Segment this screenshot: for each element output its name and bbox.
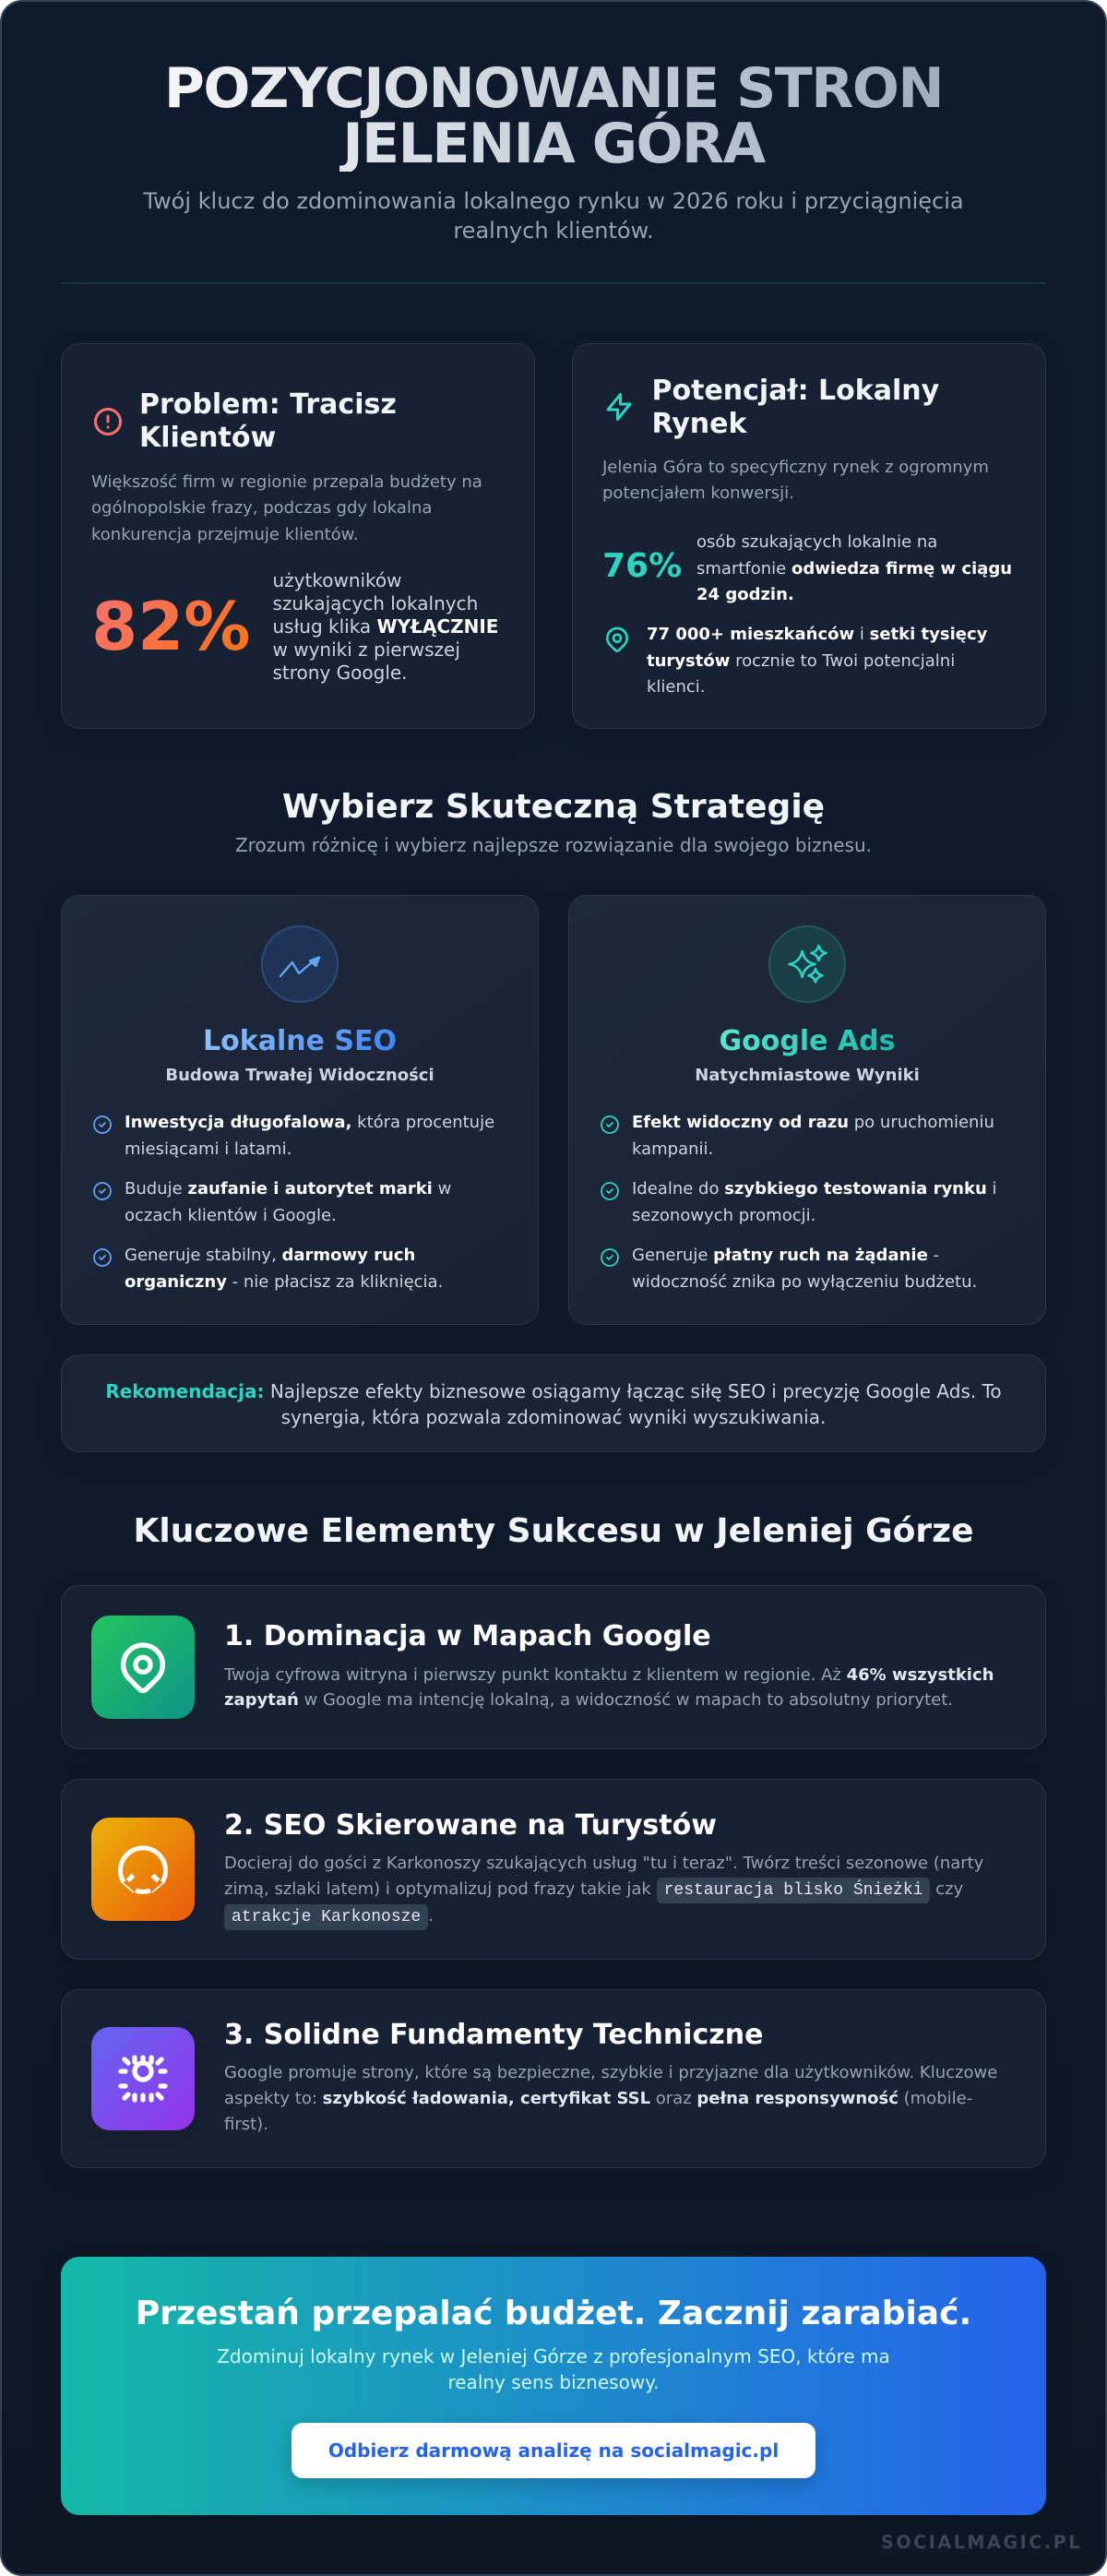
- element 1 title: 1. Dominacja w Mapach Google: [224, 1620, 711, 1652]
- CTA heading: Przestań przepalać budżet. Zacznij zarabiać.: [136, 2294, 971, 2332]
- panel: local SEO: [61, 895, 539, 1325]
- icon: chip: [91, 2027, 195, 2130]
- benefit 1: kampanii.: [632, 1139, 713, 1159]
- Ads subtitle: Natychmiastowe Wyniki: [695, 1066, 920, 1085]
- benefit 2: sezonowych promocji.: [632, 1206, 815, 1225]
- problem heading: [139, 388, 397, 454]
- strategy subtitle: Zrozum różnicę i wybierz najlepsze rozwiązanie dla swojego biznesu.: [235, 834, 872, 856]
- element 3 text: [224, 2063, 997, 2134]
- panel: element 2: [61, 1779, 1046, 1960]
- subtitle: realnych klientów.: [453, 218, 654, 244]
- benefit 3: organiczny - nie płacisz za kliknięcia.: [125, 1272, 443, 1292]
- header: [61, 56, 1046, 284]
- benefit 2: Buduje zaufanie i autorytet marki w: [125, 1179, 451, 1199]
- potential heading: Potencjał: Lokalny: [651, 375, 939, 407]
- title: [61, 61, 1046, 172]
- element 2 text: Docieraj do gości z Karkonoszy szukających usług "tu i teraz". Twórz treści sezonowe (narty: [224, 1854, 983, 1873]
- benefit 3: Generuje stabilny, darmowy ruch: [125, 1246, 415, 1265]
- stat description: [273, 569, 498, 684]
- panel: call to action: [61, 2257, 1046, 2515]
- potential description: [601, 458, 989, 503]
- problem heading: Problem: Tracisz: [139, 388, 397, 421]
- element 2 title: 2. SEO Skierowane na Turystów: [224, 1809, 717, 1842]
- benefit 3: [93, 1246, 443, 1292]
- potential heading: Rynek: [651, 408, 746, 440]
- panel: Google Ads: [568, 895, 1046, 1325]
- icon: map pin: [91, 1616, 195, 1719]
- potential heading: [651, 375, 939, 440]
- potential description: Jelenia Góra to specyficzny rynek z ogromnym: [602, 458, 989, 477]
- benefit 1: miesiącami i latami.: [125, 1139, 292, 1159]
- problem description: ogólnopolskie frazy, podczas gdy lokalna: [91, 498, 432, 518]
- strategy title: Wybierz Skuteczną Strategię: [282, 788, 825, 826]
- stat description: w wyniki z pierwszej: [273, 638, 460, 661]
- stat description: smartfonie odwiedza firmę w ciągu: [696, 559, 1012, 578]
- element 3 text: first).: [224, 2115, 268, 2134]
- icon: map pin: [606, 627, 628, 652]
- stat description: osób szukających lokalnie na: [696, 532, 937, 552]
- watermark: SOCIALMAGIC.PL: [881, 2532, 1082, 2553]
- icon: life ring: [91, 1818, 195, 1921]
- section heading: key elements: Kluczowe Elementy Sukcesu w Jeleniej Górze: [133, 1512, 974, 1550]
- panel: potential: [572, 343, 1046, 729]
- icon: trend chart: [261, 925, 339, 1003]
- stat description: 24 godzin.: [696, 585, 794, 604]
- icon: lightning: [606, 393, 632, 421]
- CTA button: Odbierz darmową analizę na socialmagic.pl: [328, 2439, 779, 2462]
- CTA description: realny sens biznesowy.: [447, 2371, 660, 2393]
- panel: problem: [61, 343, 535, 729]
- element 1 text: [223, 1665, 994, 1710]
- benefit 3: [601, 1246, 977, 1292]
- divider: [61, 282, 1046, 284]
- problem description: [91, 472, 482, 544]
- section heading: strategy: [235, 788, 872, 856]
- CTA button: [292, 2423, 815, 2478]
- problem description: konkurencja przejmuje klientów.: [91, 525, 358, 544]
- element 2 text: zimą, szlaki latem) i optymalizuj pod frazy takie jak restauracja blisko Śnieżki czy: [224, 1878, 963, 1899]
- residents and tourists text: klienci.: [647, 677, 706, 697]
- residents and tourists text: turystów rocznie to Twoi potencjalni: [647, 651, 955, 670]
- subtitle: Twój klucz do zdominowania lokalnego rynku w 2026 roku i przyciągnięcia: [143, 188, 964, 214]
- problem description: Większość firm w regionie przepala budżety na: [91, 472, 482, 492]
- element 2 text: [224, 1854, 983, 1930]
- residents and tourists text: [647, 625, 987, 697]
- benefit 2: [601, 1179, 997, 1225]
- CTA description: Zdominuj lokalny rynek w Jeleniej Górze z profesjonalnym SEO, które ma: [217, 2345, 890, 2367]
- callout: recommendation: [61, 1354, 1046, 1452]
- stat: 82%: 82%: [91, 588, 250, 665]
- element 1 text: Twoja cyfrowa witryna i pierwszy punkt kontaktu z klientem w regionie. Aż 46% wszystkich: [224, 1665, 994, 1685]
- benefit 2: oczach klientów i Google.: [125, 1206, 337, 1225]
- title: JELENIA GÓRA: [342, 112, 765, 176]
- panel: element 3: [61, 1989, 1046, 2168]
- potential description: potencjałem konwersji.: [602, 483, 794, 503]
- element 3 text: Google promuje strony, które są bezpieczne, szybkie i przyjazne dla użytkowników. Kluczowe: [224, 2063, 997, 2082]
- icon: alert circle: [94, 408, 122, 435]
- benefit 1: Inwestycja długofalowa, która procentuje: [125, 1113, 494, 1132]
- SEO title: Lokalne SEO: [203, 1025, 397, 1057]
- stat description: usług klika WYŁĄCZNIE: [273, 615, 498, 638]
- stat description: użytkowników: [273, 569, 402, 591]
- element 1 text: zapytań w Google ma intencję lokalną, a widoczność w mapach to absolutny priorytet.: [224, 1690, 953, 1710]
- recommendation text: [105, 1380, 1002, 1428]
- benefit 1: [93, 1113, 494, 1159]
- CTA description: [217, 2345, 890, 2393]
- element 2 text: atrakcje Karkonosze .: [232, 1906, 434, 1926]
- stat: 76%: 76%: [602, 547, 682, 585]
- benefit 2: Idealne do szybkiego testowania rynku i: [632, 1179, 997, 1199]
- element 3 text: aspekty to: szybkość ładowania, certyfikat SSL oraz pełna responsywność (mobile-: [224, 2089, 972, 2108]
- benefit 3: widoczność znika po wyłączeniu budżetu.: [632, 1272, 977, 1292]
- benefit 3: Generuje płatny ruch na żądanie -: [632, 1246, 939, 1265]
- benefit 1: [601, 1113, 994, 1159]
- stat description: [696, 532, 1012, 604]
- benefit 2: [93, 1179, 451, 1225]
- recommendation text: synergia, która pozwala zdominować wyniki wyszukiwania.: [281, 1406, 826, 1428]
- SEO subtitle: Budowa Trwałej Widoczności: [165, 1066, 434, 1085]
- recommendation text: Rekomendacja: Najlepsze efekty biznesowe osiągamy łącząc siłę SEO i precyzję Google Ads. To: [105, 1380, 1002, 1402]
- benefit 1: Efekt widoczny od razu po uruchomieniu: [632, 1113, 994, 1132]
- stat description: strony Google.: [273, 662, 408, 684]
- Ads title: Google Ads: [720, 1025, 895, 1057]
- stat description: szukających lokalnych: [273, 592, 478, 614]
- title: POZYCJONOWANIE STRON: [164, 56, 943, 121]
- element 3 title: 3. Solidne Fundamenty Techniczne: [224, 2019, 763, 2051]
- subtitle: [143, 188, 964, 244]
- problem heading: Klientów: [139, 422, 276, 454]
- residents and tourists text: 77 000+ mieszkańców i setki tysięcy: [647, 625, 987, 644]
- panel: element 1: [61, 1585, 1046, 1749]
- icon: sparkles: [768, 925, 846, 1003]
